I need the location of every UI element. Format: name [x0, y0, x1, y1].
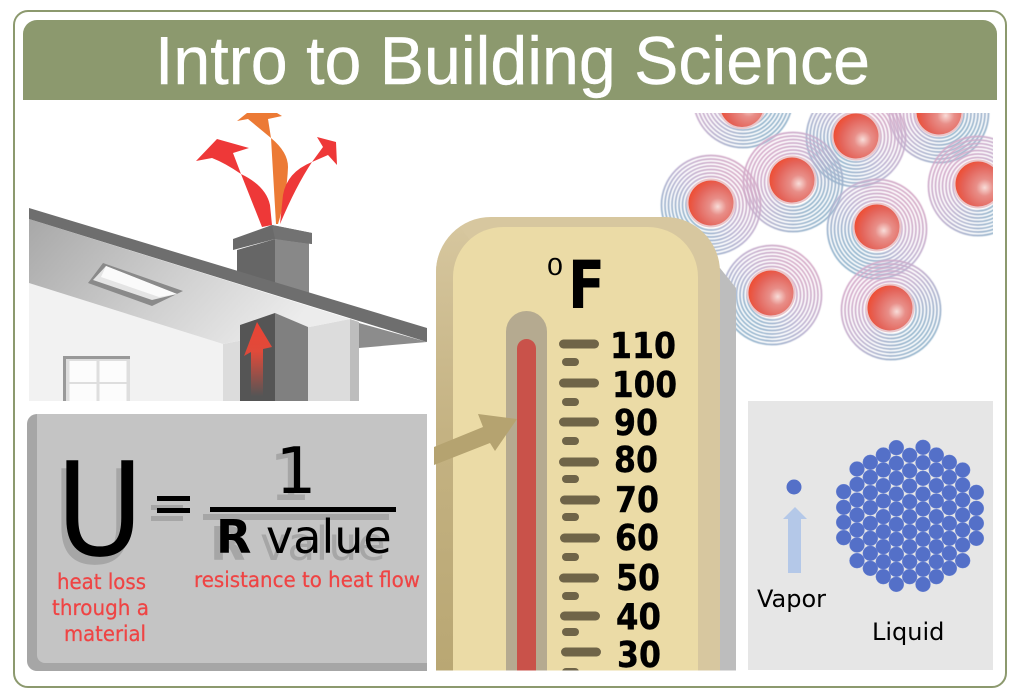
molecule [927, 135, 993, 237]
scale numbers: 80 [614, 440, 658, 481]
fraction bar [210, 507, 396, 512]
caption: U [52, 570, 149, 646]
overhang [359, 323, 427, 348]
chimney stack [237, 239, 309, 296]
face [453, 227, 698, 690]
panel background [748, 401, 993, 670]
mercury column [517, 339, 536, 690]
molecule [805, 113, 907, 188]
shadow [720, 268, 736, 670]
equals sign [157, 496, 190, 513]
arrow: right red heat plume [280, 137, 337, 224]
caption: U: material [64, 622, 146, 646]
molecule [694, 113, 792, 149]
window [63, 356, 130, 401]
numerator: 1 [276, 435, 316, 509]
scale numbers [610, 326, 677, 676]
panel: U value formula [27, 414, 427, 671]
molecule [842, 260, 940, 360]
arrow: orange heat plume [237, 113, 288, 224]
label: liquid: Liquid [872, 618, 944, 646]
formula shadow: U [51, 443, 139, 594]
scale numbers: 100 [612, 365, 677, 406]
arrow: warm air rising [244, 322, 272, 396]
scale numbers: 40 [616, 597, 661, 638]
formula shadow: R value [210, 517, 386, 571]
scale numbers: 30 [617, 635, 661, 676]
vapor molecule [786, 480, 802, 494]
house wall [29, 283, 223, 401]
scale numbers: 110 [610, 326, 676, 367]
left edge shading [436, 246, 453, 670]
corner wall [223, 319, 359, 401]
tick marks [559, 340, 601, 676]
liquid molecule cluster [836, 440, 984, 592]
molecule [722, 246, 822, 344]
illustration: house roof and chimney heat loss [29, 113, 427, 401]
chimney cap [233, 225, 312, 250]
caption: U: through a [52, 596, 149, 620]
skylight [88, 263, 183, 306]
label: vapor: Vapor [757, 585, 826, 613]
illustration: molecules with energy rings [660, 113, 993, 361]
caption: U: heat loss [57, 570, 146, 594]
formula shadow: 1 [269, 439, 311, 516]
arrow: vapor rising [783, 507, 807, 573]
title banner [23, 20, 997, 100]
roof soffit [29, 219, 350, 344]
panel background [27, 414, 427, 671]
body [436, 217, 720, 690]
interior chimney column [240, 313, 308, 401]
panel: vapor and liquid water [748, 401, 993, 670]
caption: R value: resistance to heat flow [194, 568, 420, 592]
roof edge [29, 208, 427, 342]
scale numbers: 70 [615, 480, 659, 521]
title text: Intro to Building Science [155, 23, 870, 99]
molecule [828, 180, 926, 278]
thermometer [434, 217, 736, 690]
glass tube [506, 311, 547, 690]
denominator: R value [216, 510, 392, 564]
molecule [744, 132, 842, 232]
scale numbers: 50 [616, 558, 660, 599]
U symbol: U [56, 435, 144, 586]
molecule [888, 113, 990, 164]
formula shadow [51, 439, 389, 594]
degree mark: 0 [546, 255, 564, 281]
molecule [662, 156, 760, 254]
scale numbers: 60 [615, 518, 659, 559]
arrow: temperature pointer [434, 414, 517, 465]
fahrenheit unit: F [568, 247, 605, 324]
scale numbers: 90 [614, 403, 658, 444]
arrow: left red heat plume [196, 139, 272, 227]
